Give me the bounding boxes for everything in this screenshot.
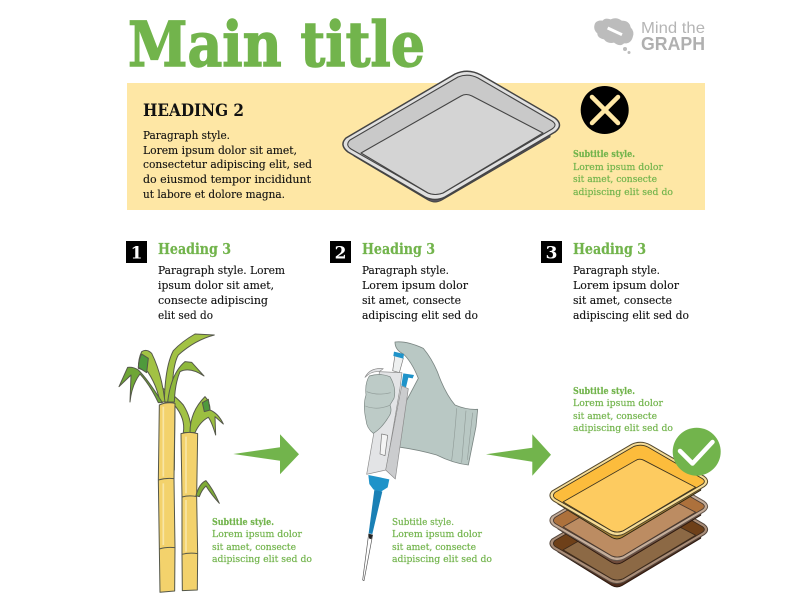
subtitle text: step 2: sit amet, consecte	[392, 542, 476, 553]
subtitle text: step 1	[212, 517, 312, 565]
logo: Mind the Graph: GRAPH	[641, 34, 705, 54]
subtitle text: step 1: Lorem ipsum dolor	[212, 529, 302, 540]
intro paragraph: Lorem ipsum dolor sit amet,	[143, 144, 297, 157]
icon: grey tray	[343, 71, 560, 202]
step 2 header: Lorem ipsum dolor	[362, 279, 469, 292]
logo: Mind the Graph: Mind the	[641, 20, 705, 37]
fingers	[364, 374, 395, 433]
subtitle text: step 3: sit amet, consecte	[573, 411, 657, 422]
pipette body	[393, 355, 403, 373]
subtitle text: panel: adipiscing elit sed do	[573, 187, 673, 198]
stalks	[158, 403, 219, 592]
tray: yellow	[550, 442, 708, 539]
step 1 header: elit sed do	[158, 309, 213, 322]
subtitle text: panel: Subtitle style.	[573, 149, 635, 160]
icon: check in circle	[673, 428, 721, 476]
arrow: step 1 to step 2	[233, 434, 299, 474]
icon: gloved hand with pipette	[363, 342, 478, 581]
arrow: step 2 to step 3	[486, 434, 551, 476]
step 2 header: Paragraph style.	[362, 264, 449, 277]
step 2 header: adipiscing elit sed do	[362, 309, 478, 322]
large stalk and leaves	[119, 334, 214, 470]
subtitle text: step 2	[392, 517, 492, 565]
glove	[395, 342, 478, 465]
step 1 header: Heading 3	[158, 241, 231, 258]
subtitle text: step 3: adipiscing elit sed do	[573, 423, 673, 434]
subtitle text: panel: sit amet, consecte	[573, 174, 657, 185]
subtitle text: step 2: Lorem ipsum dolor	[392, 529, 482, 540]
step 2 header	[330, 241, 478, 322]
subtitle text: step 3: Subtitle style.	[573, 386, 635, 397]
subtitle text: step 3: Lorem ipsum dolor	[573, 398, 663, 409]
step 3 header: adipiscing elit sed do	[573, 309, 689, 322]
subtitle text: panel: Lorem ipsum dolor	[573, 162, 663, 173]
step 3 header: Heading 3	[573, 241, 646, 258]
icon: stacked trays	[550, 442, 708, 587]
subtitle text: step 1: adipiscing elit sed do	[212, 554, 312, 565]
intro paragraph: do eiusmod tempor incididunt	[143, 173, 312, 186]
step 1 header	[126, 241, 285, 322]
subtitle text: step 2: Subtitle style.	[392, 517, 454, 528]
step 2 header: sit amet, consecte	[362, 294, 461, 307]
step 1 header: consecte adipiscing	[158, 294, 268, 307]
tray: dark brown	[550, 490, 708, 587]
step 3 header: sit amet, consecte	[573, 294, 672, 307]
subtitle text: step 2: adipiscing elit sed do	[392, 554, 492, 565]
intro paragraph: consectetur adipiscing elit, sed	[143, 158, 312, 171]
step 2 header: 2	[335, 244, 346, 264]
title: Main title	[128, 8, 425, 81]
subtitle text: panel	[573, 149, 673, 198]
icon: cross in circle	[581, 86, 629, 134]
panel: yellow intro	[127, 71, 705, 210]
step 2 header: Heading 3	[362, 241, 435, 258]
heading 2: HEADING 2	[143, 101, 244, 121]
intro paragraph: Paragraph style.	[143, 129, 230, 142]
tray: mid brown	[550, 467, 708, 564]
step 3 header: Lorem ipsum dolor	[573, 279, 680, 292]
intro paragraph: ut labore et dolore magna.	[143, 188, 285, 201]
step 1 header: ipsum dolor sit amet,	[158, 279, 274, 292]
logo: Mind the Graph	[594, 18, 705, 54]
subtitle text: step 3	[573, 386, 673, 434]
step 1 header: Paragraph style. Lorem	[158, 264, 285, 277]
step 3 header: 3	[546, 244, 557, 264]
subtitle text: step 1: sit amet, consecte	[212, 542, 296, 553]
step 1 header: 1	[131, 244, 142, 264]
subtitle text: step 1: Subtitle style.	[212, 517, 274, 528]
icon: sugar cane	[119, 334, 223, 592]
step 3 header	[541, 241, 689, 322]
intro paragraph	[143, 129, 312, 201]
step 3 header: Paragraph style.	[573, 264, 660, 277]
small tuft	[157, 385, 223, 435]
